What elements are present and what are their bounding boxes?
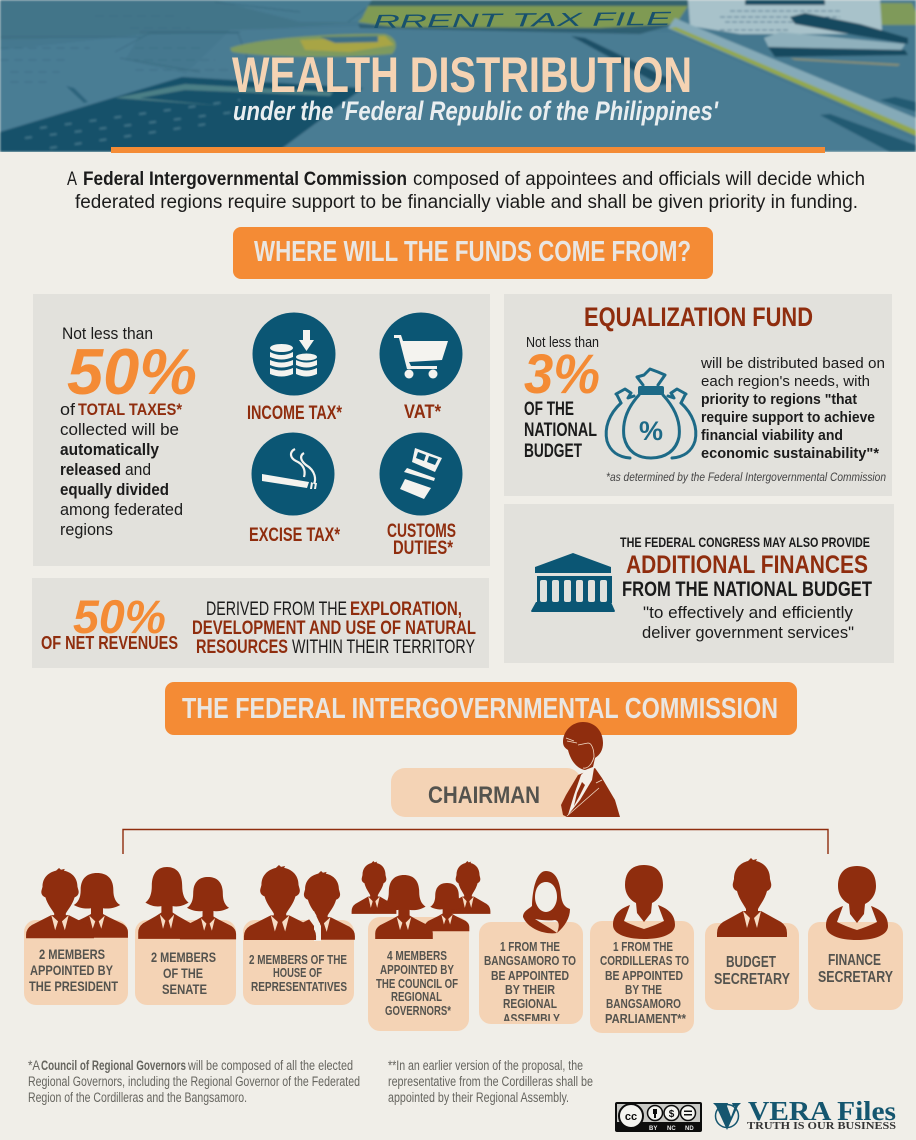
badge: creative commons: NC [667, 1126, 676, 1132]
label: BE APPOINTED [491, 968, 569, 983]
section heading: commission [165, 682, 797, 735]
label: REGIONAL [503, 996, 557, 1011]
section heading: commission: THE FEDERAL INTERGOVERNMENTAL COMMISSION [182, 693, 778, 725]
icon: man [717, 858, 787, 937]
logo: VERA Files [713, 1096, 897, 1132]
label [600, 939, 689, 1026]
figure: chairman [561, 722, 620, 817]
intro text [67, 169, 865, 213]
label: excise tax: EXCISE TAX* [249, 525, 340, 546]
footnote: earlier version [388, 1058, 593, 1105]
member 4: council of regional governors [352, 861, 490, 1031]
icon: woman in hijab [523, 871, 570, 933]
quote: deliver government services" [642, 623, 854, 642]
icon: excise tax cigarette [252, 432, 334, 516]
label: 2 MEMBERS [151, 949, 216, 965]
big number 50%: 50% [67, 335, 197, 408]
natural resources text [192, 599, 476, 658]
label: customs duties: CUSTOMS [387, 521, 456, 542]
distribution text: priority to regions "that [701, 391, 857, 408]
footnote: earlier version: appointed by their Regional Assembly. [388, 1090, 569, 1105]
label [376, 949, 458, 1018]
description of tax share: released [60, 460, 121, 479]
label: PARLIAMENT** [605, 1011, 687, 1026]
intro text: A [67, 169, 77, 190]
connector bracket [123, 830, 828, 854]
label: THE COUNCIL OF [376, 977, 458, 991]
label: HOUSE OF [273, 965, 322, 980]
percent sign: % [639, 416, 663, 446]
distribution text: will be distributed based on [700, 355, 885, 372]
label: OF THE [163, 965, 203, 981]
label: BANGSAMORO TO [484, 953, 576, 968]
label: customs duties [387, 521, 456, 559]
orange header rule [111, 147, 825, 153]
label [151, 949, 216, 997]
quote [642, 603, 854, 642]
label: customs duties: DUTIES* [393, 538, 453, 559]
description of tax share: TOTAL TAXES* [78, 400, 182, 419]
label: SECRETARY [818, 969, 894, 986]
member 1: appointed by the president [24, 868, 128, 1005]
icon: two people [26, 868, 128, 938]
footnote: council of regional governors: Regional Governors, including the Regional Governor of the Federated [28, 1074, 360, 1089]
label: 1 FROM THE [500, 939, 560, 954]
big number 50%: 50% [73, 590, 166, 643]
label: income tax: INCOME TAX* [247, 403, 342, 424]
chairman pill: CHAIRMAN [428, 782, 540, 809]
description of tax share: and [125, 460, 151, 479]
description of tax share: automatically [60, 440, 159, 459]
heading: additional finances: ADDITIONAL FINANCES [626, 551, 868, 579]
title: WEALTH DISTRIBUTION [232, 47, 692, 103]
footnote: earlier version: representative from the Cordilleras shall be [388, 1074, 593, 1089]
icon: two people [244, 865, 355, 941]
member 7: budget secretary [705, 858, 799, 1010]
label: BE APPOINTED [605, 968, 683, 983]
label: VAT: VAT* [404, 402, 442, 423]
natural resources text: EXPLORATION, [350, 599, 462, 620]
label: REGIONAL [391, 990, 442, 1004]
label: APPOINTED BY [30, 962, 114, 978]
icon: two people [138, 867, 236, 939]
description of tax share: among federated [60, 500, 183, 519]
subtitle: under the 'Federal Republic of the Philippines' [233, 96, 719, 126]
text: not less than: Not less than [526, 334, 599, 351]
label: BANGSAMORO [606, 996, 681, 1011]
badge: creative commons: BY [649, 1126, 657, 1132]
natural resources text: DERIVED FROM THE [206, 599, 347, 620]
member 2: senate [135, 867, 236, 1005]
label: 1 FROM THE [613, 939, 673, 954]
footnote: council of regional governors: Council of Regional Governors [41, 1058, 186, 1073]
panel: additional finances [504, 504, 894, 663]
panel: 50% of total taxes [33, 294, 490, 566]
intro text: federated regions require support to be financially viable and shall be given priority in funding. [75, 192, 858, 213]
big number 3%: 3% [524, 342, 600, 405]
label: APPOINTED BY [380, 963, 455, 977]
description of tax share: collected will be [60, 420, 179, 439]
label: of net revenues: OF NET REVENUES [41, 633, 178, 653]
intro text: composed of appointees and officials will decide which [413, 169, 865, 190]
footnote: council of regional governors: Region of the Cordilleras and the Bangsamoro. [28, 1090, 247, 1105]
logo mark [713, 1103, 741, 1130]
description of tax share: equally divided [60, 480, 169, 499]
description of tax share: of [60, 400, 75, 419]
heading: equalization fund: EQUALIZATION FUND [584, 302, 813, 332]
badge: creative commons: cc [625, 1111, 637, 1123]
label: 4 MEMBERS [387, 949, 447, 963]
label: SECRETARY [714, 971, 791, 988]
header banner with tax-paperwork photo [0, 0, 916, 152]
wordmark: VERA Files [748, 1096, 896, 1126]
label: SENATE [162, 981, 207, 997]
distribution text: each region's needs, with [701, 373, 870, 390]
icon: VAT shopping cart [380, 312, 462, 396]
icon: income tax coins [252, 312, 336, 396]
label: THE PRESIDENT [29, 978, 118, 994]
label [818, 952, 894, 986]
panel: 50% of net revenues [32, 578, 489, 668]
label [484, 939, 576, 1026]
member 6: from the Cordilleras [590, 865, 694, 1033]
label: BY THEIR [505, 982, 556, 997]
section heading: funds: WHERE WILL THE FUNDS COME FROM? [254, 236, 691, 268]
label: FINANCE [828, 952, 881, 969]
label: CORDILLERAS TO [600, 953, 689, 968]
background photo text: RRENT TAX FILE [373, 9, 672, 33]
label: REPRESENTATIVES [251, 979, 347, 994]
natural resources text: WITHIN THEIR TERRITORY [292, 637, 475, 658]
footnote: council of regional governors: will be composed of all the elected [187, 1058, 353, 1073]
description of tax share [60, 400, 183, 539]
distribution text: economic sustainability"* [701, 445, 879, 462]
label: of the national budget: BUDGET [524, 441, 582, 462]
label [249, 952, 347, 994]
distribution text: financial viability and [701, 427, 843, 444]
label: BY THE [625, 982, 662, 997]
description of tax share: regions [60, 520, 113, 539]
natural resources text: RESOURCES [196, 637, 288, 658]
badge: creative commons [615, 1102, 702, 1132]
chairman pill [391, 768, 581, 817]
icon: woman [613, 865, 675, 939]
icon: money bags with percent [606, 369, 696, 458]
distribution text: require support to achieve [701, 409, 875, 426]
section heading: funds [233, 227, 713, 279]
natural resources text: DEVELOPMENT AND USE OF NATURAL [192, 618, 476, 639]
label: GOVERNORS* [385, 1004, 451, 1018]
member 5: from the Bangsamoro [479, 871, 583, 1026]
quote: "to effectively and efficiently [643, 603, 853, 622]
footnote: as determined: *as determined by the Federal Intergovernmental Commission [606, 472, 886, 484]
label: of the national budget: NATIONAL [524, 420, 597, 441]
label: 2 MEMBERS [39, 946, 105, 962]
icon: government building [531, 553, 615, 612]
icon: four people [352, 861, 490, 939]
label [714, 954, 791, 988]
badge: creative commons: ND [685, 1126, 694, 1132]
footnote: earlier version: **In an earlier version of the proposal, the [388, 1058, 583, 1073]
member 3: house of representatives [243, 865, 355, 1005]
badge: creative commons: $ [669, 1109, 675, 1120]
label: of the national budget [524, 399, 597, 462]
member 8: finance secretary [808, 866, 903, 1010]
intro text: Federal Intergovernmental Commission [83, 169, 407, 190]
panel: equalization fund [504, 294, 892, 496]
distribution text [700, 355, 885, 462]
icon: customs duties package [380, 432, 462, 516]
tagline: TRUTH IS OUR BUSINESS [747, 1121, 897, 1132]
label: of the national budget: OF THE [524, 399, 574, 420]
icon: woman [826, 866, 888, 940]
footnote: council of regional governors [28, 1058, 360, 1105]
text: not less than: Not less than [62, 324, 153, 343]
label [29, 946, 118, 994]
footnote: council of regional governors: *A [28, 1058, 40, 1073]
label: BUDGET [726, 954, 776, 971]
label: 2 MEMBERS OF THE [249, 952, 347, 967]
